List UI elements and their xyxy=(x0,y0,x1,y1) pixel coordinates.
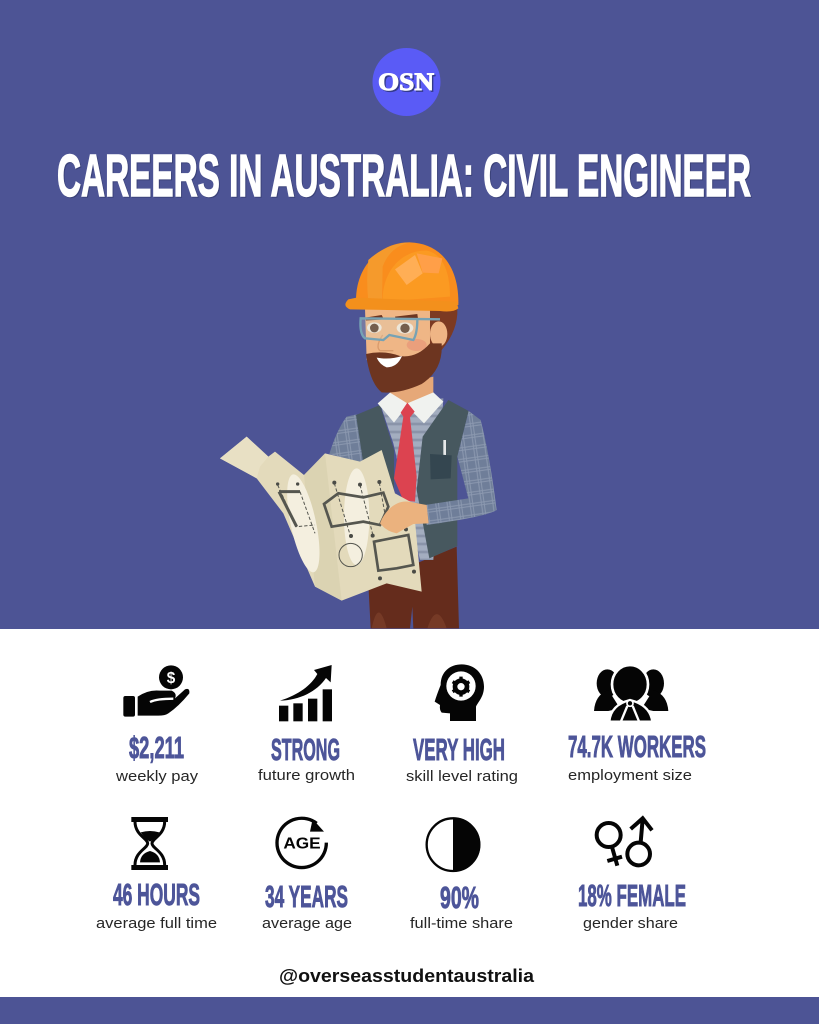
necktie xyxy=(394,403,417,502)
stat: future growth xyxy=(258,665,355,784)
value: 46 HOURS xyxy=(113,877,200,912)
icon: rising bar chart xyxy=(279,665,332,721)
label: full-time share xyxy=(410,915,513,932)
icon: half circle xyxy=(427,817,480,872)
panel: header background xyxy=(0,0,819,629)
collar xyxy=(378,392,443,423)
stat: gender share xyxy=(578,818,686,932)
label: gender share xyxy=(583,915,678,932)
value: STRONG xyxy=(271,732,340,767)
icon: group of workers xyxy=(594,665,668,724)
value: 18% FEMALE xyxy=(578,878,686,913)
icon: hourglass xyxy=(131,817,168,870)
panel: stats background xyxy=(0,629,819,997)
label: future growth xyxy=(258,767,355,784)
ear xyxy=(430,321,447,347)
eyebrows xyxy=(365,314,418,321)
label: average full time xyxy=(96,915,217,932)
label: average age xyxy=(262,915,352,932)
hair back xyxy=(427,308,457,350)
illustration: civil engineer holding blueprint xyxy=(220,242,497,628)
label: skill level rating xyxy=(406,768,518,785)
value: $2,211 xyxy=(129,730,184,765)
logo: OSN badge: OSN xyxy=(380,70,436,98)
label: weekly pay xyxy=(115,768,199,785)
stat: skill level xyxy=(406,664,518,785)
vest pocket and pen xyxy=(430,440,452,479)
stat: average age xyxy=(262,818,352,932)
value: 34 YEARS xyxy=(265,879,348,914)
blueprint dots xyxy=(276,480,416,580)
icon: head with gear xyxy=(435,664,484,721)
neck xyxy=(390,377,433,407)
icon: gender symbols xyxy=(597,818,652,866)
left sleeve xyxy=(329,414,363,463)
social handle: @overseasstudentaustralia xyxy=(279,966,535,986)
stat: full-time share xyxy=(410,817,513,932)
logo: OSN badge xyxy=(372,48,440,116)
value: VERY HIGH xyxy=(413,732,505,767)
legs xyxy=(368,547,459,628)
hard hat xyxy=(345,242,458,311)
footer bar xyxy=(0,997,819,1024)
shirt xyxy=(380,398,443,560)
stat: weekly pay xyxy=(115,665,199,785)
blueprint sheet xyxy=(220,437,422,601)
value: 90% xyxy=(440,880,479,915)
blueprint plans xyxy=(278,483,413,571)
face xyxy=(365,308,430,373)
beard xyxy=(366,343,442,393)
icon: age cycle: AGE xyxy=(283,835,321,852)
eyes xyxy=(367,322,413,334)
cheek blush and nose xyxy=(378,335,427,351)
smile xyxy=(377,356,402,367)
icon: hand holding coin: $ xyxy=(167,670,176,687)
stat: employment size xyxy=(568,665,706,784)
logo: OSN badge: OSN xyxy=(378,69,434,96)
label: employment size xyxy=(568,767,692,784)
safety glasses xyxy=(360,318,440,340)
right sleeve xyxy=(425,411,497,525)
stat: average full time xyxy=(96,817,217,932)
vest xyxy=(356,400,469,558)
hand xyxy=(380,501,429,533)
value: 74.7K WORKERS xyxy=(568,729,706,764)
